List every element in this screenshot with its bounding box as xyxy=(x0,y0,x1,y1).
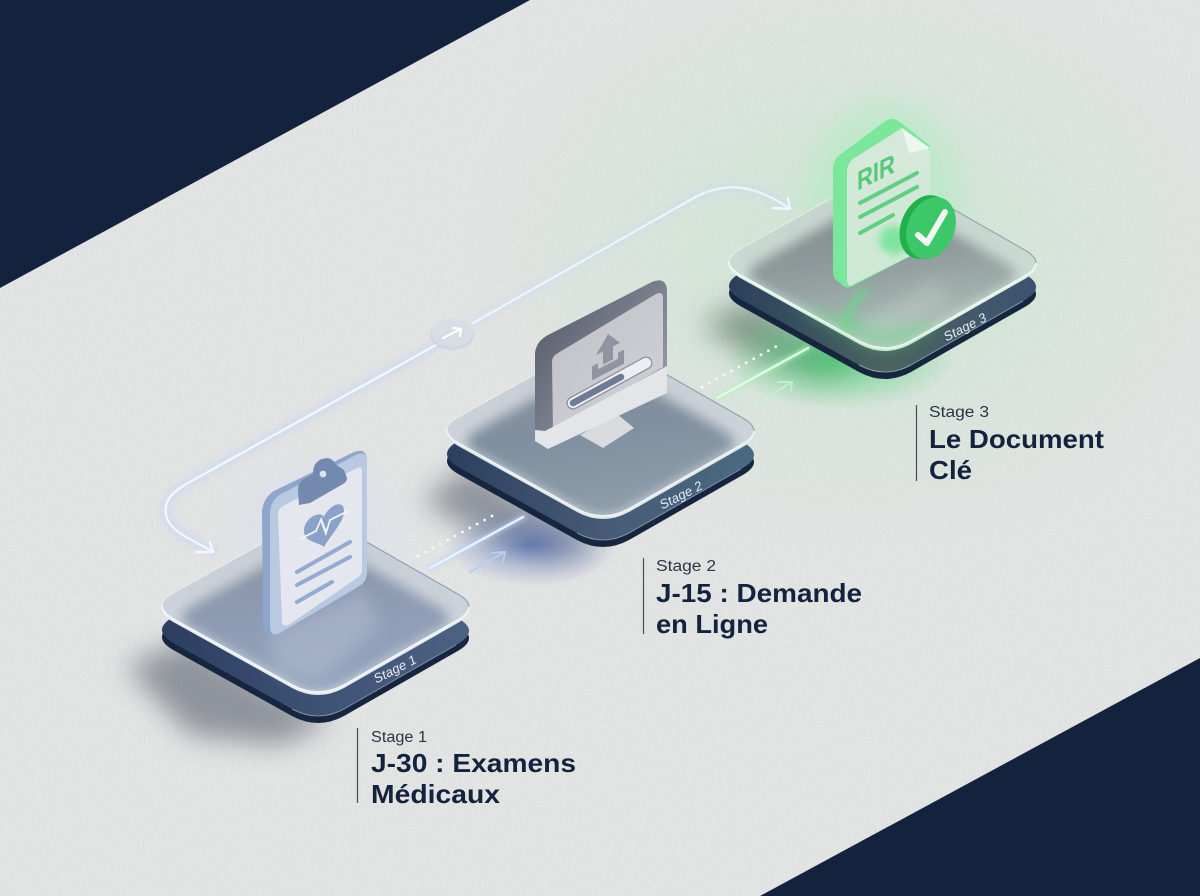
stage 3 plate label: Stage 3 xyxy=(941,310,989,344)
navy corner: bottom right xyxy=(760,658,1200,896)
monitor screen xyxy=(552,293,663,430)
check badge xyxy=(879,187,965,267)
platform base xyxy=(729,201,1036,379)
corner fold xyxy=(902,128,930,153)
monitor chin xyxy=(535,366,667,449)
text block: stage 2: J-15 : Demande xyxy=(656,578,862,608)
glow: clipboard halo xyxy=(205,440,425,640)
glow: blue under stage 2 xyxy=(445,503,615,587)
text block: stage 1: Stage 1 xyxy=(371,729,427,746)
navy corner: top left xyxy=(0,0,530,288)
RIR text: RIR xyxy=(857,148,895,198)
panel: stage 2 platform xyxy=(446,374,755,547)
upload icon xyxy=(592,326,624,380)
glass plate xyxy=(729,177,1036,351)
text block: stage 2: Stage 2 xyxy=(656,558,716,575)
platform base xyxy=(447,369,754,547)
cast shadows xyxy=(125,300,860,745)
glass plate xyxy=(161,542,470,695)
document lines xyxy=(860,173,917,233)
text block: stage 2: en Ligne xyxy=(656,609,768,639)
text block: stage 3: Le Document xyxy=(929,424,1104,454)
arrowhead: stage 1 xyxy=(196,542,213,552)
monitor shell xyxy=(535,280,667,448)
text lines xyxy=(297,542,350,602)
text block: stage 3 xyxy=(916,404,1104,485)
connector: stage 1 to stage 2 xyxy=(418,516,523,572)
long curved connector with arrows xyxy=(166,187,790,552)
panel: stage 1 platform xyxy=(162,521,469,723)
green reflection xyxy=(846,290,868,330)
arrowhead: stage 3 xyxy=(773,198,790,209)
connector: stage 2 to stage 3 xyxy=(702,346,808,402)
heart with pulse xyxy=(300,499,348,559)
progress bar xyxy=(573,363,646,403)
text block: stage 1: J-30 : Examens xyxy=(371,748,576,778)
green ambient wash xyxy=(460,0,1200,550)
panel: stage 3 platform xyxy=(729,177,1036,379)
clipboard board xyxy=(262,451,367,636)
midpoint arrow badge xyxy=(430,319,474,350)
glass plate xyxy=(446,374,755,519)
text block: stage 2 xyxy=(644,558,862,639)
glow: green under stage 3 xyxy=(725,306,955,410)
stage 2 plate label: Stage 2 xyxy=(657,478,705,512)
text block: stage 1: Médicaux xyxy=(371,779,501,809)
monitor stand xyxy=(580,414,634,448)
text block: stage 1 xyxy=(358,728,576,809)
text block: stage 3: Stage 3 xyxy=(929,404,989,421)
text block: stage 3: Clé xyxy=(929,455,972,485)
icon: RIR document with check xyxy=(833,119,965,288)
document body xyxy=(833,119,930,288)
icon: medical clipboard xyxy=(262,451,367,636)
glow: document halo xyxy=(810,100,960,290)
stage 1 plate label: Stage 1 xyxy=(371,652,419,686)
clipboard paper xyxy=(278,467,362,626)
document front xyxy=(847,128,930,285)
glass reflection xyxy=(855,280,950,340)
platform base xyxy=(162,545,469,723)
icon: monitor with upload xyxy=(535,280,667,449)
clipboard clip xyxy=(298,458,347,505)
